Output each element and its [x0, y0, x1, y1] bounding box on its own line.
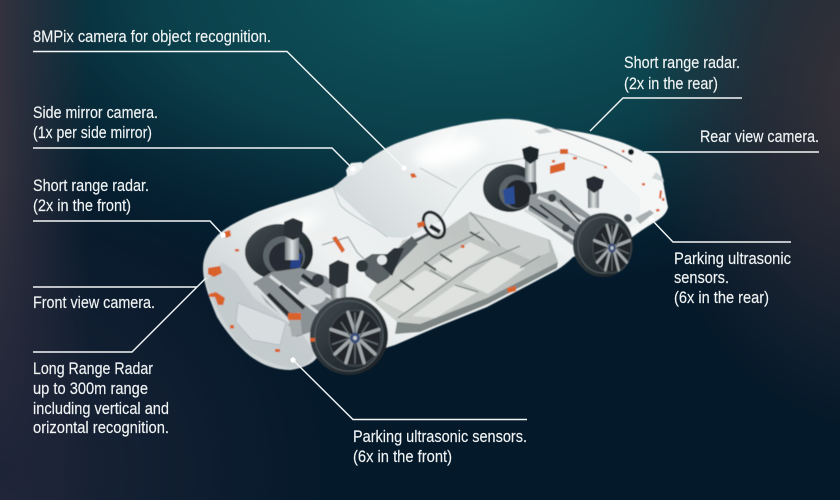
label: parking sensors rear: (6x in the rear): [674, 289, 769, 307]
windshield glass: [333, 126, 463, 238]
battery sill: [395, 262, 558, 334]
near rear suspension strut: [586, 176, 604, 208]
label: parking sensors front: [353, 428, 527, 466]
label: short range radar rear: [624, 54, 740, 93]
rear lamp shading: [652, 172, 664, 182]
orange sensors: [208, 149, 664, 352]
label: side mirror camera: Side mirror camera.: [33, 104, 158, 122]
label: long range radar: [33, 360, 169, 437]
label: parking sensors rear: [674, 250, 791, 307]
label: front view camera: Front view camera.: [33, 294, 155, 312]
hood highlight: [256, 208, 324, 244]
lighter battery cells: [380, 242, 525, 318]
label: rear view camera: Rear view camera.: [700, 128, 819, 146]
label: short range radar rear: Short range radar.: [624, 54, 740, 72]
door frame outline: [438, 151, 607, 222]
label: short range radar rear: (2x in the rear): [624, 75, 718, 93]
label: side mirror camera: [33, 104, 158, 142]
car body shell: [203, 119, 668, 370]
side mirror: [346, 162, 363, 176]
central mechanical bundle: [322, 236, 418, 284]
label: parking sensors front: Parking ultrasonic sensors.: [353, 428, 527, 446]
label: side mirror camera: (1x per side mirror): [33, 124, 152, 142]
label: short range radar front: (2x in the front): [33, 197, 131, 215]
label: long range radar: Long Range Radar: [33, 360, 153, 378]
label: parking sensors rear: Parking ultrasonic: [674, 250, 791, 268]
battery platform: [368, 212, 558, 334]
leader lines: [33, 52, 819, 420]
battery seams: [376, 212, 540, 318]
rear subframe: [525, 190, 654, 247]
roof highlight: [410, 131, 486, 173]
label: long range radar: orizontal recognition.: [33, 419, 169, 437]
car illustration: [203, 119, 668, 375]
front bumper shading: [206, 262, 314, 368]
bumper grille: [236, 303, 286, 345]
label: long range radar: including vertical and: [33, 400, 169, 418]
label: 8MPix camera: 8MPix camera for object recognition.: [33, 28, 271, 46]
far front suspension strut: [284, 218, 303, 260]
near front suspension strut: [329, 260, 349, 298]
far rear suspension strut: [522, 146, 539, 182]
label: short range radar front: [33, 177, 149, 215]
hood crease: [333, 168, 457, 237]
trunk edge line: [553, 128, 632, 162]
label: short range radar front: Short range radar.: [33, 177, 149, 195]
near front wheel: [310, 297, 388, 375]
far rear wheel: [483, 164, 537, 212]
front subframe: [253, 268, 340, 337]
label: long range radar: up to 300m range: [33, 380, 148, 398]
upper battery pack: [468, 215, 550, 260]
steering wheel and column: [375, 208, 449, 272]
label: parking sensors front: (6x in the front): [353, 448, 452, 466]
far front wheel: [245, 224, 313, 280]
label: parking sensors rear: sensors.: [674, 269, 729, 287]
shark fin antenna: [534, 128, 552, 134]
near rear wheel: [573, 213, 633, 277]
rear view camera lens: [628, 149, 634, 155]
cabin interior tone: [400, 151, 640, 258]
leader dots: [220, 165, 654, 363]
